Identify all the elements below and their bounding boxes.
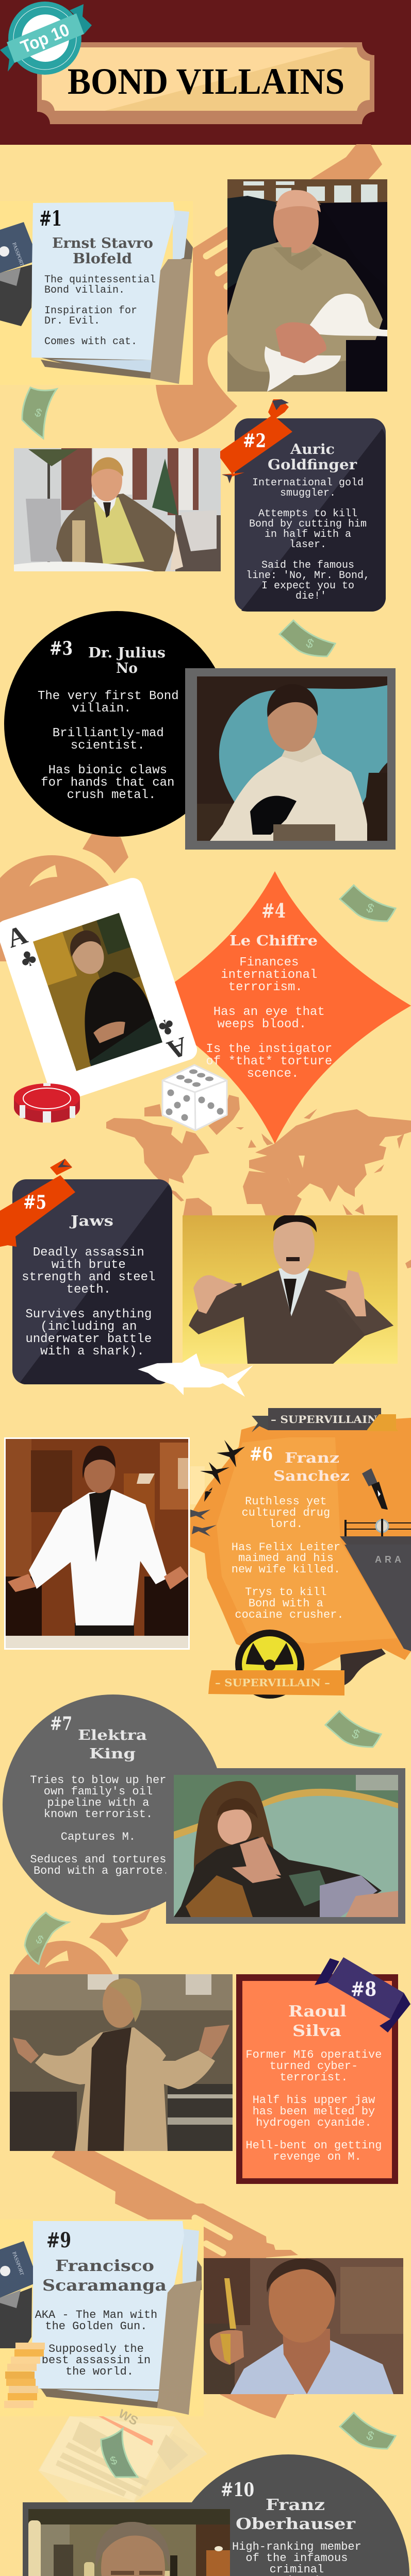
body text: Former MI6 operative [245, 2048, 382, 2061]
card index: ace of clubs [3, 883, 191, 1102]
number: #10 [221, 2479, 254, 2501]
body text: Half his upper jaw [253, 2094, 375, 2107]
body text: hydrogen cyanide. [256, 2116, 372, 2129]
icon: newspapers: WS [116, 2406, 140, 2428]
banner: supervillain top: – SUPERVILLAIN [271, 1413, 377, 1426]
body text: Bond with a [249, 1597, 323, 1610]
photo: Scaramanga [204, 2258, 403, 2394]
name heading: Le Chiffre [229, 933, 318, 949]
name heading: Scaramanga [42, 2277, 167, 2295]
body text: Tries to blow up her [30, 1774, 166, 1787]
money: right of #3: $ [304, 636, 316, 651]
name heading: King [89, 1746, 136, 1762]
body text: terrorist. [280, 2071, 348, 2084]
photo: Elektra [174, 1775, 398, 1917]
panel: #1 Blofeld dossier [0, 201, 193, 385]
body text: Bond villain. [44, 284, 125, 296]
body text: with a shark). [40, 1345, 144, 1359]
background gun silhouette: bottom [52, 2151, 298, 2418]
icon: passport and wallet [0, 222, 39, 326]
body text: Bond by cutting him [249, 518, 367, 530]
body text: Has bionic claws [48, 764, 167, 777]
dossier papers and folder [31, 2221, 202, 2415]
name heading [268, 442, 357, 473]
money: top right of #4 [340, 885, 396, 921]
photo: Silva [10, 1974, 233, 2151]
body text: weeps blood. [217, 1018, 306, 1031]
number: #8 [351, 1977, 376, 2001]
panel: #8 Raoul Silva [236, 1957, 410, 2184]
number: #1 [39, 207, 62, 231]
money: top right of #10: $ [365, 2428, 376, 2444]
body text: The very first Bond [38, 689, 179, 703]
name heading: Ernst Stavro [52, 235, 153, 251]
body text: Has an eye that [213, 1005, 325, 1019]
card index: ace of clubs: ♣ [16, 945, 41, 974]
icon: falling bomb [362, 1468, 388, 1510]
body text: Attempts to kill [258, 508, 357, 520]
name heading: Franz [266, 2496, 325, 2514]
body text: underwater battle [25, 1332, 152, 1346]
body text: die!' [295, 590, 326, 602]
panel: #9 Scaramanga dossier [0, 2219, 204, 2416]
number: #7 [50, 1713, 72, 1735]
body text: international [221, 968, 317, 982]
badge: top 10 [0, 2, 92, 75]
name heading [42, 2257, 167, 2295]
money: below #6 [325, 1711, 381, 1747]
number: #4 [261, 899, 286, 922]
photo: Le Chiffre [33, 913, 162, 1071]
photo frame: Dr. No [185, 668, 396, 850]
body text: Finances [239, 956, 299, 970]
body text: best assassin in [42, 2354, 151, 2367]
body text: villain. [72, 702, 131, 716]
smudge: dark hull shape [335, 1649, 386, 1687]
panel: #4 Le Chiffre diamond [139, 871, 411, 1144]
icon: poker chip [14, 1083, 80, 1123]
icon: ship [340, 1519, 411, 1651]
dossier papers and folder [31, 202, 193, 384]
body text: High-ranking member [232, 2540, 361, 2553]
body text: cultured drug [242, 1506, 330, 1519]
name heading: Jaws [70, 1213, 113, 1229]
body text: of the infamous [245, 2552, 348, 2565]
money: on the newspapers [101, 2429, 138, 2477]
background grenade: middle [13, 1906, 152, 1975]
body text: scence. [247, 1067, 299, 1081]
number: #5 [23, 1192, 46, 1213]
playing card: Le Chiffre [0, 875, 200, 1105]
body text: maimed and his [238, 1552, 334, 1565]
title plaque [37, 42, 374, 124]
money: below #7 [25, 1912, 69, 1964]
money: left of #2 [22, 387, 57, 438]
body text: scientist. [71, 739, 145, 753]
body text: Bond with a garrote. [34, 1865, 170, 1877]
body text: Captures M. [61, 1831, 136, 1843]
icon: radiation sign [235, 1630, 304, 1699]
name heading [78, 1727, 147, 1762]
body text: Hell-bent on getting [245, 2139, 382, 2152]
name heading: Auric [290, 442, 335, 457]
body text: new wife killed. [232, 1563, 340, 1576]
body text: of *that* torture [206, 1055, 332, 1069]
name heading: No [116, 660, 138, 676]
name heading: Elektra [78, 1727, 147, 1743]
body text: known terrorist. [44, 1808, 153, 1821]
money: top right of #10 [340, 2413, 396, 2449]
icon: passport and wallet: PASSPORT [11, 2251, 25, 2276]
badge: top 10: Top 10 [18, 20, 72, 57]
name heading [273, 1450, 350, 1484]
banner: supervillain bottom [208, 1670, 344, 1696]
body text: Is the instigator [206, 1042, 332, 1056]
name heading: Sanchez [273, 1468, 350, 1484]
card index: ace of clubs: A [163, 1031, 191, 1065]
body text: line: 'No, Mr. Bond, [246, 570, 370, 582]
photo: Sanchez [4, 1437, 190, 1650]
name heading: Oberhauser [236, 2515, 356, 2533]
body text: lord. [269, 1518, 303, 1531]
body text: has been melted by [253, 2105, 375, 2118]
name heading [52, 235, 153, 267]
name heading [88, 645, 166, 676]
icon: fighter planes [190, 1440, 245, 1536]
name heading: Franz [285, 1450, 339, 1466]
icon: passport and wallet [0, 2241, 39, 2348]
body text: strength and steel [22, 1270, 155, 1284]
body text: AKA - The Man with [35, 2309, 157, 2321]
name heading: Goldfinger [268, 457, 357, 473]
body text: the Golden Gun. [45, 2320, 147, 2333]
body text: Brilliantly-mad [53, 726, 164, 740]
body text: Survives anything [25, 1308, 152, 1321]
body text: in half with a [265, 529, 351, 540]
body text: with brute [52, 1258, 126, 1272]
panel: #2 Goldfinger [220, 399, 386, 612]
photo frame: Oberhauser [23, 2502, 230, 2576]
background grenade: top [0, 832, 128, 997]
name heading [288, 2003, 347, 2040]
photo: Jaws [183, 1215, 398, 1364]
icon: ship: ARA [375, 1554, 404, 1565]
body text: pipeline with a [47, 1797, 149, 1809]
body text: Deadly assassin [33, 1246, 144, 1260]
money: right of #3 [280, 620, 335, 656]
panel: #5 Jaws [0, 1159, 172, 1384]
name heading: Silva [292, 2022, 341, 2040]
icon: shark [138, 1353, 253, 1397]
body text: own family's oil [44, 1785, 153, 1798]
ribbon: rank 8 [315, 1957, 410, 2032]
number: #9 [46, 2228, 71, 2252]
money: below #6: $ [350, 1726, 361, 1742]
icon: passport and wallet: PASSPORT [11, 242, 25, 267]
title plaque: BOND VILLAINS [68, 61, 344, 102]
body text: I expect you to [261, 580, 354, 592]
body text: Said the famous [261, 560, 354, 571]
body text: teeth. [67, 1283, 111, 1297]
number: #2 [243, 430, 266, 452]
money: on the newspapers: $ [108, 2453, 119, 2468]
body text: The quintessential [44, 274, 156, 286]
body text: turned cyber- [270, 2060, 358, 2073]
photo: Oberhauser [28, 2509, 230, 2576]
body text: criminal [270, 2563, 324, 2576]
icon: coin stack [4, 2343, 45, 2408]
body text: Seduces and tortures [30, 1853, 166, 1866]
body text: Comes with cat. [44, 336, 137, 348]
number: #3 [50, 638, 73, 659]
banner: supervillain top [252, 1408, 398, 1432]
body text: crush metal. [67, 788, 156, 802]
icon: die [162, 1065, 227, 1130]
body text: revenge on M. [273, 2150, 361, 2163]
name heading [236, 2496, 356, 2533]
icon: newspapers [38, 2406, 207, 2503]
body text: the world. [65, 2365, 134, 2378]
body text: cocaine crusher. [235, 1608, 344, 1621]
ribbon: rank 2 [220, 399, 292, 483]
photo: Blofeld with cat [227, 179, 387, 392]
card index: ace of clubs: A [3, 920, 31, 954]
ribbon: rank 5 [0, 1159, 75, 1247]
name heading: Blofeld [73, 251, 132, 267]
background world map [106, 1095, 411, 1268]
header band [0, 0, 411, 145]
panel: #6 Sanchez splat [190, 1408, 411, 1699]
body text: for hands that can [41, 776, 174, 790]
panel: #7 Elektra King [3, 1694, 223, 1915]
body text: smuggler. [280, 487, 336, 499]
name heading: Dr. Julius [88, 645, 166, 661]
body text: International gold [252, 477, 364, 489]
body text: Has Felix Leiter [232, 1541, 340, 1554]
photo: Goldfinger on the porch [14, 448, 221, 571]
photo frame: Elektra [166, 1768, 405, 1924]
panel: #10 Oberhauser [167, 2454, 409, 2576]
banner: supervillain bottom: – SUPERVILLAIN – [215, 1676, 330, 1689]
body text: Ruthless yet [245, 1495, 327, 1508]
money: below #7: $ [34, 1933, 46, 1946]
money: left of #2: $ [33, 405, 43, 420]
number: #6 [250, 1444, 273, 1465]
body text: Supposedly the [48, 2343, 144, 2355]
body text: terrorism. [228, 980, 303, 994]
card index: ace of clubs: ♣ [154, 1012, 179, 1041]
name heading: Francisco [55, 2257, 154, 2275]
background gun silhouette: top [156, 144, 382, 442]
body text: laser. [289, 539, 326, 551]
panel: #3 Dr. No [4, 611, 230, 837]
body text: Inspiration for [44, 305, 137, 317]
body text: (including an [40, 1320, 137, 1334]
body text: Trys to kill [245, 1586, 327, 1599]
body text: Dr. Evil. [44, 315, 100, 327]
money: top right of #4: $ [365, 901, 376, 916]
name heading: Raoul [288, 2003, 347, 2021]
photo: Dr. No [197, 676, 387, 841]
